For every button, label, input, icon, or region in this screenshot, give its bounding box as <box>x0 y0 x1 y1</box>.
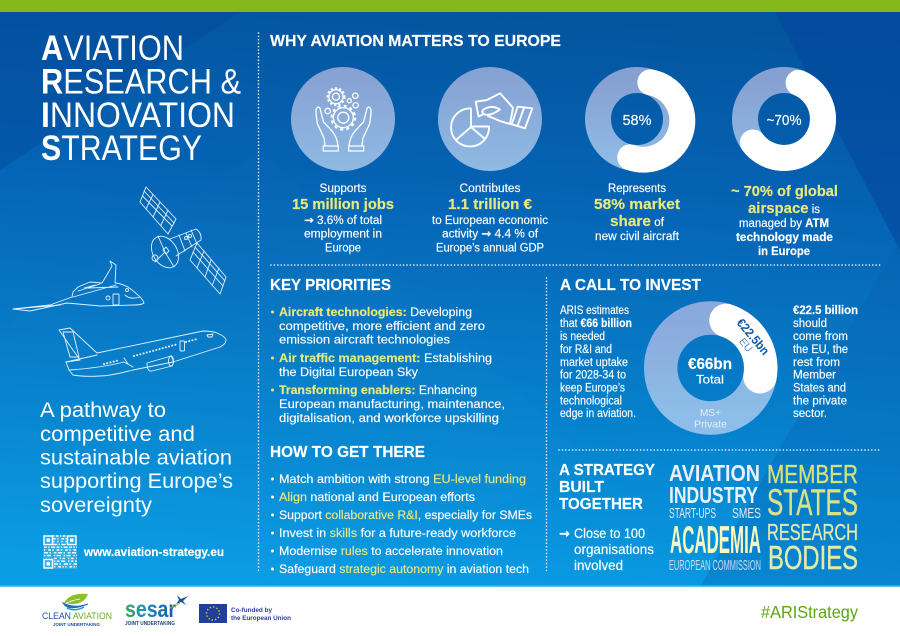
donut chart: 70%: ~70% <box>766 112 802 129</box>
text: invest left: is needed <box>560 331 605 343</box>
text: close to 100 organisations: → <box>559 526 570 542</box>
logo: clean aviation: CLEAN AVIATION <box>42 611 112 622</box>
QR code <box>43 535 77 569</box>
text: invest right: States and <box>793 382 846 394</box>
bullet list: actions <box>271 472 532 576</box>
bullet list: priorities: European manufacturing, maintenance, <box>279 397 505 411</box>
text: 15 million jobs: 15 million jobs <box>292 196 394 213</box>
logo: clean aviation <box>42 594 112 628</box>
subtitle: supporting Europe’s <box>40 470 233 493</box>
text: invest left: ARIS estimates <box>560 305 629 317</box>
text: 70% of global airspace: technology made <box>736 232 833 244</box>
icon: hand and pie chart <box>438 67 542 171</box>
subtitle: A pathway to <box>40 399 166 422</box>
panel: how to get there <box>270 444 532 576</box>
text: 1.1 trillion: Contributes <box>460 183 521 195</box>
heading: strategy built together: TOGETHER <box>559 496 643 513</box>
bullet list: actions: Safeguard strategic autonomy in aviation tech <box>279 562 529 576</box>
text: 1.1 trillion: to European economic <box>432 215 548 227</box>
text: invest left: that €66 billion <box>560 318 632 330</box>
bullet list: actions: Modernise rules to accelerate innovation <box>279 544 503 558</box>
text: invest right <box>793 305 858 420</box>
logo: co-funded by the EU: the European Union <box>231 615 291 622</box>
logo: clean aviation: JOINT UNDERTAKING <box>53 622 100 628</box>
text: invest right: sector. <box>793 408 827 420</box>
logo: co-funded by the EU: Co-funded by <box>231 607 272 614</box>
text: 58% market share: new civil aircraft <box>595 231 680 243</box>
panel: a strategy built together <box>559 459 858 576</box>
text: close to 100 organisations: Close to 100 <box>574 526 645 541</box>
bullet list: priorities: Aircraft technologies: Developing <box>279 305 472 319</box>
text: invest right: should <box>793 318 827 330</box>
text: 1.1 trillion <box>432 183 548 254</box>
bullet list: priorities: Transforming enablers: Enhancing <box>279 383 477 397</box>
logo: co-funded by the EU <box>199 604 291 623</box>
word cloud: INDUSTRY <box>669 482 758 508</box>
subtitle: sovereignty <box>40 494 153 517</box>
text: 58% market share: 58% market <box>594 196 680 213</box>
donut chart: 66bn: €66bn <box>688 356 732 373</box>
bullet list: priorities: competitive, more efficient and zero <box>279 319 485 333</box>
text: 1.1 trillion: 1.1 trillion € <box>448 196 533 213</box>
text: close to 100 organisations: involved <box>574 558 623 573</box>
bullet list: priorities: emission aircraft technologies <box>279 332 450 346</box>
panel: key priorities <box>270 277 505 425</box>
text: 70% of global airspace: airspace is <box>748 200 820 217</box>
text: invest left: for 2028-34 to <box>560 370 626 382</box>
website url: www.aviation-strategy.eu <box>83 547 224 559</box>
word cloud: MEMBER <box>767 459 858 489</box>
donut chart: 58%: 58% <box>622 112 652 129</box>
logo: sesar: JOINT UNDERTAKING <box>125 621 175 627</box>
title: STRATEGY <box>41 129 202 168</box>
panel: economy <box>432 67 548 254</box>
bullet list: actions: Support collaborative R&I, especially for SMEs <box>279 508 532 522</box>
word cloud: EUROPEAN COMMISSION <box>669 557 761 574</box>
heading: a call to invest: A CALL TO INVEST <box>560 277 701 294</box>
text: close to 100 organisations <box>559 526 654 573</box>
text: invest left: edge in aviation. <box>560 408 636 420</box>
bullet list: actions: Invest in skills for a future-ready workforce <box>279 526 516 540</box>
donut chart: 66bn: MS+ <box>700 407 721 419</box>
donut chart: 70% <box>745 80 823 158</box>
text: 58% market share: Represents <box>608 183 666 195</box>
text: 58% market share <box>594 183 680 243</box>
bullet list: actions: Match ambition with strong EU-level funding <box>279 472 526 486</box>
word cloud: START-UPS <box>669 505 716 522</box>
text: 15 million jobs: Supports <box>320 183 367 195</box>
title: INNOVATION <box>41 96 235 135</box>
text: 58% market share: share of <box>610 213 665 230</box>
donut chart: 66bn: Private <box>694 418 727 430</box>
panel: global airspace <box>731 80 838 258</box>
heading: strategy built together: BUILT <box>559 479 604 496</box>
heading: how to get there: HOW TO GET THERE <box>270 444 425 461</box>
text: 70% of global airspace: ~ 70% of global <box>731 183 838 200</box>
bullet list: priorities: digitalisation, and workforce upskilling <box>279 411 499 425</box>
word cloud: AVIATION <box>669 460 760 486</box>
logo: sesar: sesar <box>125 596 176 622</box>
title: AVIATION <box>41 29 184 68</box>
heading: strategy built together: A STRATEGY <box>559 462 655 479</box>
subtitle <box>40 399 233 517</box>
heading: key priorities: KEY PRIORITIES <box>270 277 391 294</box>
panel: market share <box>594 80 682 243</box>
text: invest right: the EU, the <box>793 344 848 356</box>
word cloud: SMES <box>732 505 761 522</box>
donut chart: 66bn: €22.5bn <box>734 316 772 358</box>
hashtag: #ARIStrategy <box>761 602 858 622</box>
title <box>41 29 241 168</box>
illustration: blended wing aircraft <box>13 261 144 311</box>
text: 70% of global airspace: in Europe <box>758 246 810 258</box>
subtitle: sustainable aviation <box>40 446 232 470</box>
donut chart: 66bn <box>661 316 772 430</box>
text: close to 100 organisations: organisations <box>574 542 654 557</box>
word cloud: RESEARCH <box>767 519 858 545</box>
text: invest right: Member <box>793 370 836 382</box>
bullet list: actions: Align national and European efforts <box>279 490 475 504</box>
donut chart: 66bn: EU <box>736 336 755 355</box>
panel: a call to invest <box>560 277 858 430</box>
text: 15 million jobs: employment in <box>304 228 382 240</box>
text: 70% of global airspace <box>731 183 838 258</box>
word cloud <box>669 459 858 576</box>
illustration: satellite <box>140 187 226 294</box>
word cloud: BODIES <box>768 539 858 576</box>
text: invest right: rest from <box>793 357 840 369</box>
bullet list: priorities: the Digital European Sky <box>279 365 419 379</box>
text: invest left: market uptake <box>560 357 628 369</box>
text: invest left: keep Europe’s <box>560 382 625 394</box>
text: invest left: for R&I and <box>560 344 612 356</box>
text: invest right: come from <box>793 331 848 343</box>
heading: why aviation matters: WHY AVIATION MATTERS TO EUROPE <box>270 33 561 50</box>
panel: jobs <box>291 67 395 254</box>
text: invest right: €22.5 billion <box>793 305 858 317</box>
donut chart: 58% <box>598 80 682 160</box>
text: invest left: technological <box>560 396 622 408</box>
text: 15 million jobs: → 3.6% of total <box>304 213 382 227</box>
subtitle: competitive and <box>40 423 195 446</box>
donut chart: 66bn: Total <box>696 372 724 386</box>
word cloud: ACADEMIA <box>670 519 761 562</box>
icon: hands and gears <box>291 67 395 171</box>
text: 70% of global airspace: managed by ATM <box>739 218 829 230</box>
text: invest left <box>560 305 636 420</box>
text: 15 million jobs <box>292 183 394 254</box>
illustration: airliner <box>59 328 226 376</box>
title: RESEARCH & <box>41 62 241 102</box>
top green bar <box>0 0 900 12</box>
bullet list: priorities: Air traffic management: Establishing <box>279 351 492 365</box>
text: invest right: the private <box>793 396 847 408</box>
bullet list: priorities <box>271 305 505 425</box>
text: 15 million jobs: Europe <box>325 242 361 254</box>
heading: strategy built together <box>559 462 655 513</box>
text: 1.1 trillion: activity → 4.4 % of <box>442 226 539 240</box>
text: 1.1 trillion: Europe’s annual GDP <box>436 242 544 254</box>
